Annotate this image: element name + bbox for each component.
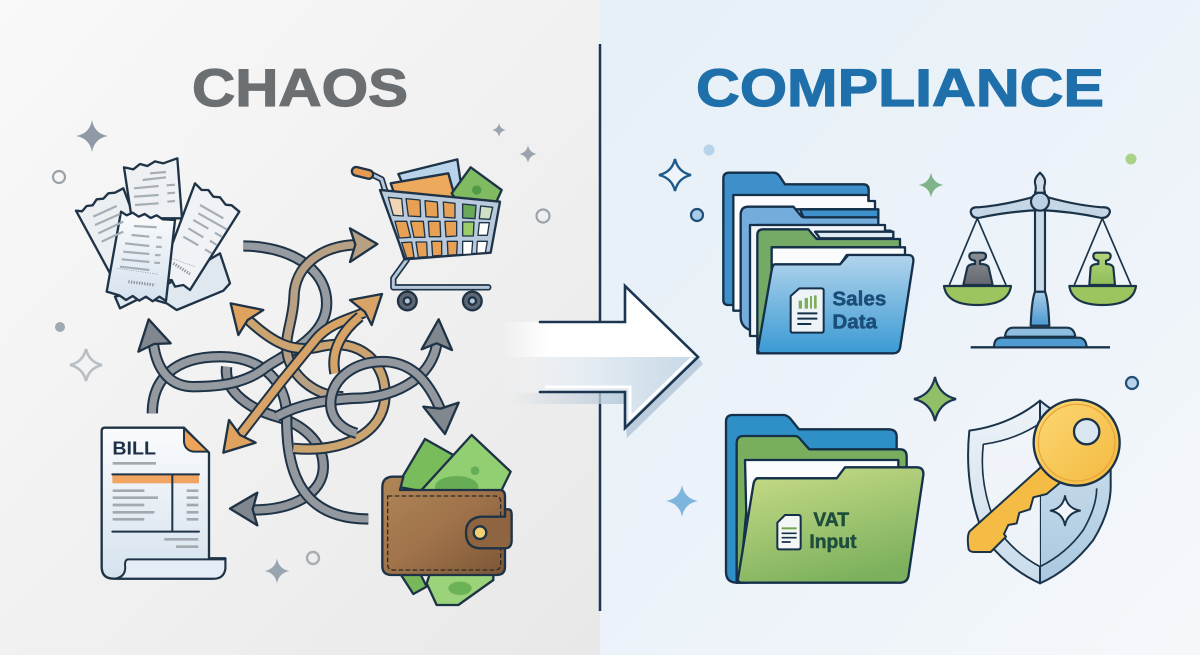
- arrow strand: gray to wallet: [152, 357, 368, 519]
- scale beam: [971, 195, 1110, 218]
- decorative sparkles: compliance side: [659, 144, 1138, 517]
- right pan: [1069, 218, 1136, 305]
- arrow strand: gray to bill: [226, 367, 323, 525]
- cart wheels: [398, 292, 482, 310]
- receipt text lines: [93, 172, 227, 285]
- folder label: vat input: [809, 510, 857, 553]
- divider line: [599, 44, 601, 611]
- title: chaos: CHAOS: [192, 59, 408, 118]
- key: [968, 400, 1120, 552]
- left pan: [944, 218, 1011, 305]
- tangled arrows: [138, 228, 459, 525]
- arrow strand: gray curve to receipts: [138, 246, 327, 387]
- folder label: sales data: [832, 288, 886, 333]
- arrow strand: orange loop to receipts: [231, 303, 385, 449]
- icon: pile of receipts: [76, 158, 239, 310]
- bill label: BILL: [112, 438, 156, 459]
- icon: vat input folder: [726, 415, 923, 583]
- icon: sales data folder stack: [723, 173, 913, 353]
- arrow strand: gray to upper right: [277, 319, 452, 417]
- icon: wallet with cash: [382, 435, 512, 605]
- chaos illustrations: [76, 158, 512, 605]
- panel: compliance background: [600, 0, 1200, 655]
- decorative sparkles: chaos side: [53, 120, 550, 584]
- arrow strand: orange diagonal: [223, 294, 382, 453]
- wallet clasp: [466, 509, 512, 548]
- cart grid cells: [388, 197, 493, 258]
- arrow strand: tan to cart: [287, 228, 377, 397]
- shield: [968, 401, 1111, 583]
- document icon: sales: [791, 288, 824, 333]
- folder label: vat input: Input: [809, 532, 857, 553]
- folder label: sales data: Sales: [832, 288, 886, 311]
- cart contents: [391, 159, 502, 205]
- cart frame: [372, 174, 488, 287]
- cash notes: [397, 435, 511, 605]
- title: compliance: COMPLIANCE: [696, 59, 1104, 118]
- document icon: vat: [777, 515, 801, 549]
- big transition arrow: [500, 286, 703, 438]
- wallet body: [382, 477, 505, 575]
- arrow strand: gray to lower right: [331, 362, 459, 434]
- folder label: vat input: VAT: [813, 510, 849, 531]
- icon: bill document: [102, 428, 225, 579]
- panel: chaos background: [0, 0, 600, 655]
- folder label: sales data: Data: [832, 310, 878, 333]
- icon: shopping cart: [351, 159, 502, 310]
- icon: balance scale: [944, 173, 1136, 347]
- icon: shield and key: [968, 400, 1120, 583]
